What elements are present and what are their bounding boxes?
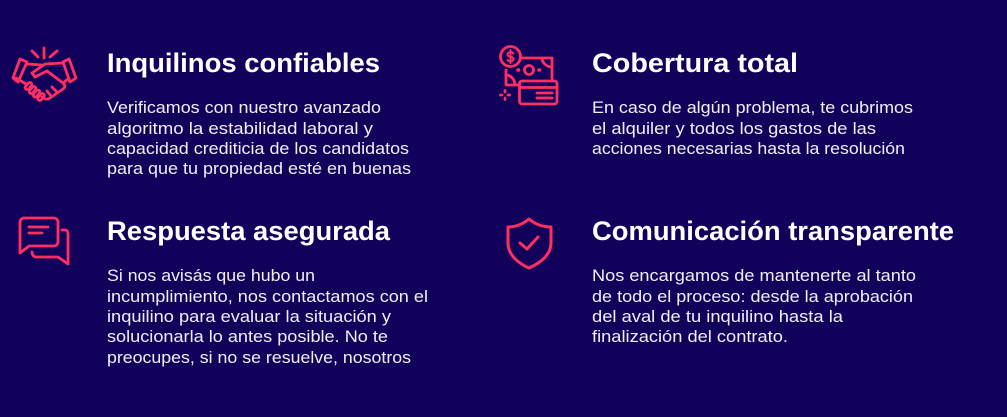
text block: Nos encargamos de mantenerte al tanto — [592, 267, 916, 285]
text block: preocupes, si no se resuelve, nosotros — [107, 349, 411, 367]
text block: incumplimiento, nos contactamos con el — [107, 288, 428, 306]
text block: algoritmo la estabilidad laboral y — [107, 120, 374, 138]
icon: money and card — [500, 46, 557, 104]
text block: Verificamos con nuestro avanzado — [107, 99, 381, 117]
heading: Comunicación transparente — [592, 216, 954, 246]
icon: handshake — [13, 48, 76, 101]
text block: inquilino para evaluar la situación y — [107, 308, 392, 326]
panel: respuesta asegurada — [20, 216, 428, 367]
text block — [107, 99, 411, 178]
text block: para que tu propiedad esté en buenas — [107, 160, 411, 178]
text block: de todo el proceso: desde la aprobación — [592, 288, 913, 306]
text block: acciones necesarias hasta la resolución — [592, 140, 905, 158]
heading: Inquilinos confiables — [107, 48, 380, 78]
text block: el alquiler y todos los gastos de las — [592, 120, 876, 138]
text block: solucionarla lo antes posible. No te — [107, 328, 388, 346]
text block — [107, 267, 428, 367]
text block — [592, 99, 913, 158]
heading: Respuesta asegurada — [107, 216, 391, 246]
text block: En caso de algún problema, te cubrimos — [592, 99, 913, 117]
panel: comunicación transparente — [508, 216, 954, 346]
text block: Si nos avisás que hubo un — [107, 267, 315, 285]
icon: chat bubbles — [20, 218, 68, 264]
text block: del aval de tu inquilino hasta la — [592, 308, 844, 326]
text block — [592, 267, 916, 346]
text block: finalización del contrato. — [592, 328, 788, 346]
heading: Cobertura total — [592, 48, 798, 78]
panel: inquilinos confiables — [13, 48, 411, 178]
text block: capacidad crediticia de los candidatos — [107, 140, 409, 158]
icon: shield with check — [508, 219, 551, 268]
panel: cobertura total — [500, 46, 913, 158]
